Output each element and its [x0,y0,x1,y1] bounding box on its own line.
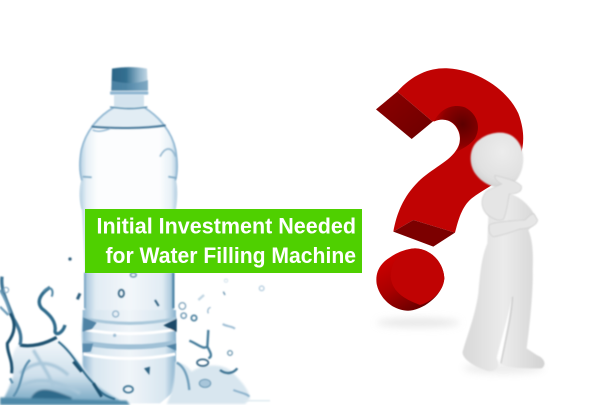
title text [96,214,356,268]
left water splash [0,257,130,405]
bottle body [80,95,177,403]
title text: Initial Investment Needed [96,214,356,238]
right water splash [167,279,270,404]
folded forearm [489,214,538,237]
question mark with thinking figure [376,68,544,374]
water bottle with splash [0,67,270,405]
banner background [85,209,362,273]
red question mark [376,68,523,311]
raised arm and hand [482,175,522,220]
body and legs [463,190,544,371]
ground shadows [377,318,543,374]
title banner [85,209,362,273]
title text: for Water Filling Machine [106,243,356,268]
head [471,133,523,188]
bottle cap [110,67,148,95]
thinking figure [463,133,544,371]
